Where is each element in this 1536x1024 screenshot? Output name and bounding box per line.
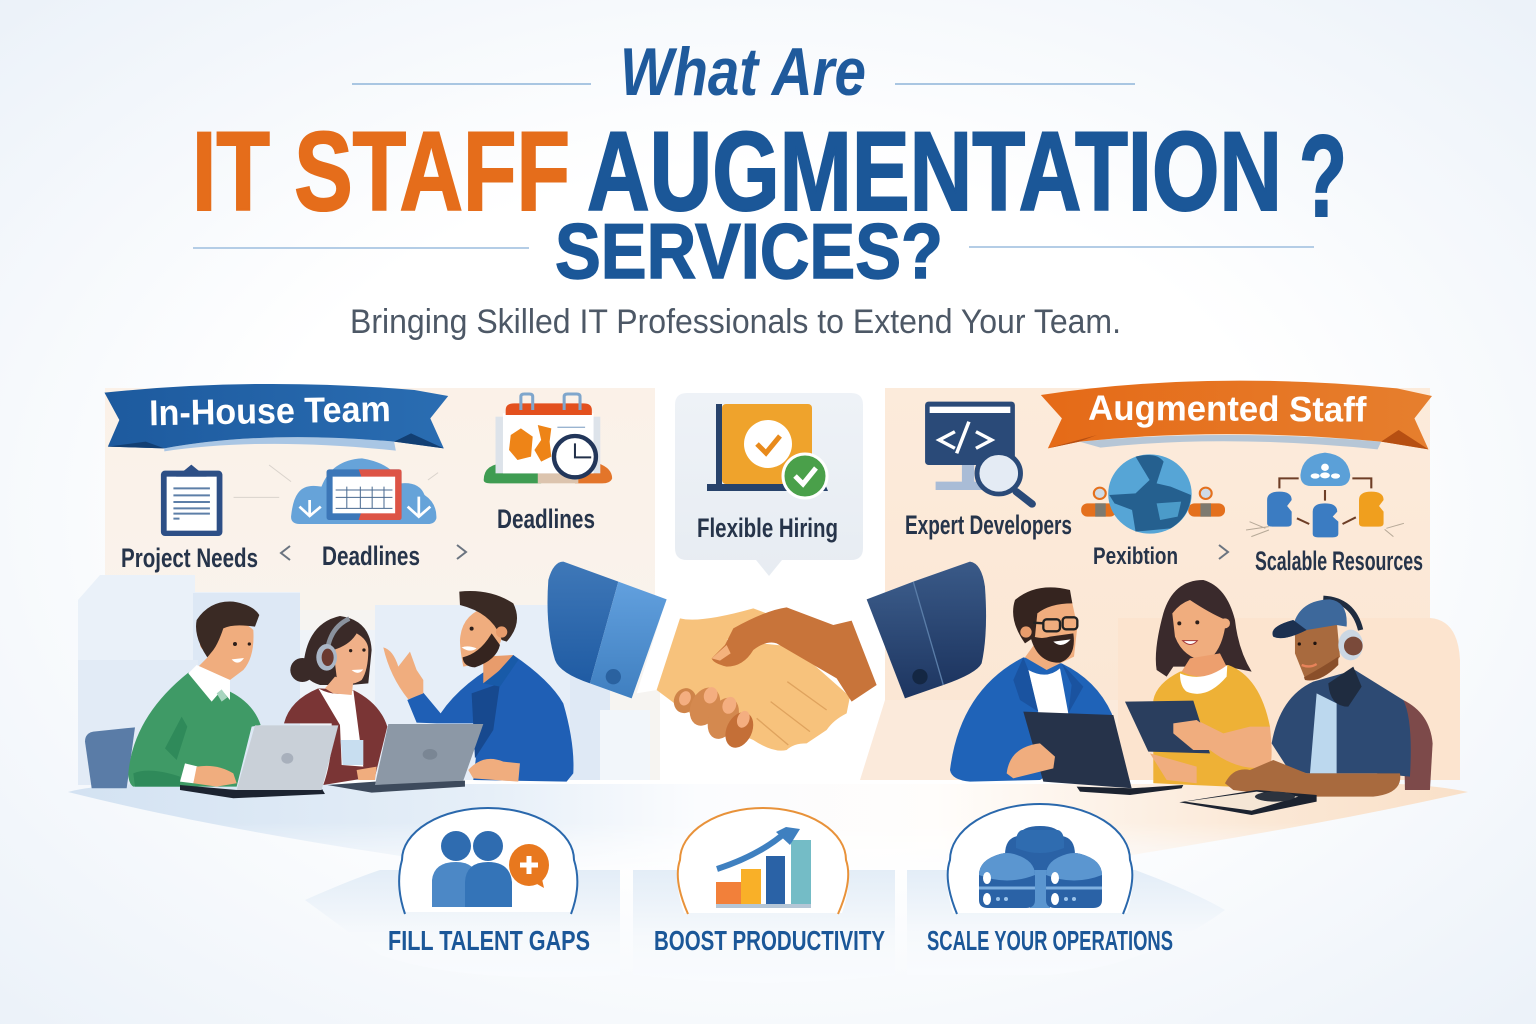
chair bbox=[85, 727, 135, 788]
icon: laptop with check bbox=[707, 404, 828, 498]
ribbon: In-House Team bbox=[104, 384, 448, 451]
heading rule left bbox=[352, 83, 591, 85]
benefit: Fill Talent Gaps bbox=[305, 808, 620, 978]
ribbon: Augmented Staff: Augmented Staff bbox=[1088, 388, 1367, 429]
icon: globe bbox=[1081, 454, 1225, 534]
icon: code monitor bbox=[925, 402, 1032, 504]
arrow: right chevron bbox=[457, 545, 466, 559]
label: Deadlines top: Deadlines bbox=[497, 504, 595, 534]
subtitle: Bringing Skilled IT Professionals to Extend Your Team. bbox=[350, 303, 1121, 341]
ribbon: In-House Team: In-House Team bbox=[149, 388, 391, 433]
heading: SERVICES: SERVICES? bbox=[555, 207, 943, 295]
laptop: silver bbox=[237, 725, 338, 790]
rule right bbox=[969, 246, 1314, 248]
title block bbox=[192, 34, 1347, 341]
label: Flexible Hiring: Flexible Hiring bbox=[697, 513, 838, 543]
label: Pexibtion: Pexibtion bbox=[1093, 543, 1178, 570]
person: woman in yellow bbox=[1150, 580, 1272, 787]
icon arc bbox=[399, 808, 578, 912]
heading: question mark: ? bbox=[1299, 111, 1347, 241]
heading: IT STAFF: IT STAFF bbox=[192, 109, 570, 234]
floor surface bbox=[68, 784, 1468, 856]
person: man with cap bbox=[1225, 598, 1411, 797]
arc stroke bbox=[948, 804, 1132, 914]
rule left bbox=[193, 247, 529, 249]
arc stroke bbox=[678, 808, 848, 914]
icon arc bbox=[677, 808, 849, 913]
arrow: right chevron bbox=[1219, 545, 1228, 559]
label: Scalable Resources: Scalable Resources bbox=[1255, 546, 1423, 576]
panel: augmented background bbox=[860, 388, 1460, 780]
hand over tablet bbox=[1173, 720, 1220, 750]
label: Deadlines left: Deadlines bbox=[322, 541, 420, 571]
label: BOOST PRODUCTIVITY bbox=[654, 925, 885, 956]
laptop: silver base bbox=[180, 785, 325, 798]
handshake bbox=[547, 562, 986, 752]
nails and creases bbox=[677, 645, 827, 745]
heading: AUGMENTATION: AUGMENTATION bbox=[587, 109, 1282, 234]
cuff: right bbox=[867, 562, 986, 698]
notepad and mouse bbox=[1179, 790, 1317, 815]
label: SCALE YOUR OPERATIONS bbox=[927, 925, 1173, 956]
card: Flexible Hiring bbox=[675, 393, 863, 576]
heading rule right bbox=[895, 83, 1135, 85]
chair bbox=[1403, 700, 1433, 790]
icon: clipboard bbox=[161, 465, 222, 536]
tablet base bbox=[1077, 785, 1183, 795]
label: FILL TALENT GAPS bbox=[388, 925, 590, 956]
icon: bar chart bbox=[716, 827, 811, 908]
icon: scalable resources network bbox=[1246, 453, 1404, 537]
benefit: Scale Your Operations bbox=[907, 804, 1225, 975]
benefit: Boost Productivity bbox=[633, 808, 895, 982]
hand on tablet bbox=[1007, 743, 1055, 778]
label: Project Needs: Project Needs bbox=[121, 543, 258, 573]
person: man with glasses bbox=[950, 587, 1117, 782]
icon: people plus bbox=[432, 831, 549, 907]
heading: What Are: What Are bbox=[620, 34, 866, 110]
icon: server stacks bbox=[979, 826, 1102, 908]
arc stroke bbox=[399, 808, 577, 914]
people: augmented staff bbox=[950, 580, 1433, 815]
hand: light left bbox=[657, 608, 850, 751]
ribbon: Augmented Staff bbox=[1041, 381, 1432, 449]
fingers: brown wrapping bbox=[670, 683, 759, 752]
person: woman with headset bbox=[284, 616, 387, 785]
panel: in-house background bbox=[78, 388, 660, 785]
people: in-house team bbox=[85, 591, 573, 798]
icon: calendar clock bbox=[484, 394, 612, 483]
icon arc bbox=[947, 804, 1133, 913]
icon: cloud calendar bbox=[234, 458, 438, 524]
arrow: left chevron bbox=[281, 546, 290, 560]
tablet: held bbox=[1125, 701, 1210, 753]
label: Expert Developers: Expert Developers bbox=[905, 510, 1072, 540]
hand: brown right bbox=[712, 607, 877, 702]
person: man in blue shirt bbox=[383, 591, 573, 782]
person: green sweater bbox=[128, 602, 261, 787]
laptop: gray bbox=[327, 724, 483, 793]
cuff: left bbox=[547, 562, 680, 698]
tablet: dark bbox=[1023, 712, 1132, 788]
